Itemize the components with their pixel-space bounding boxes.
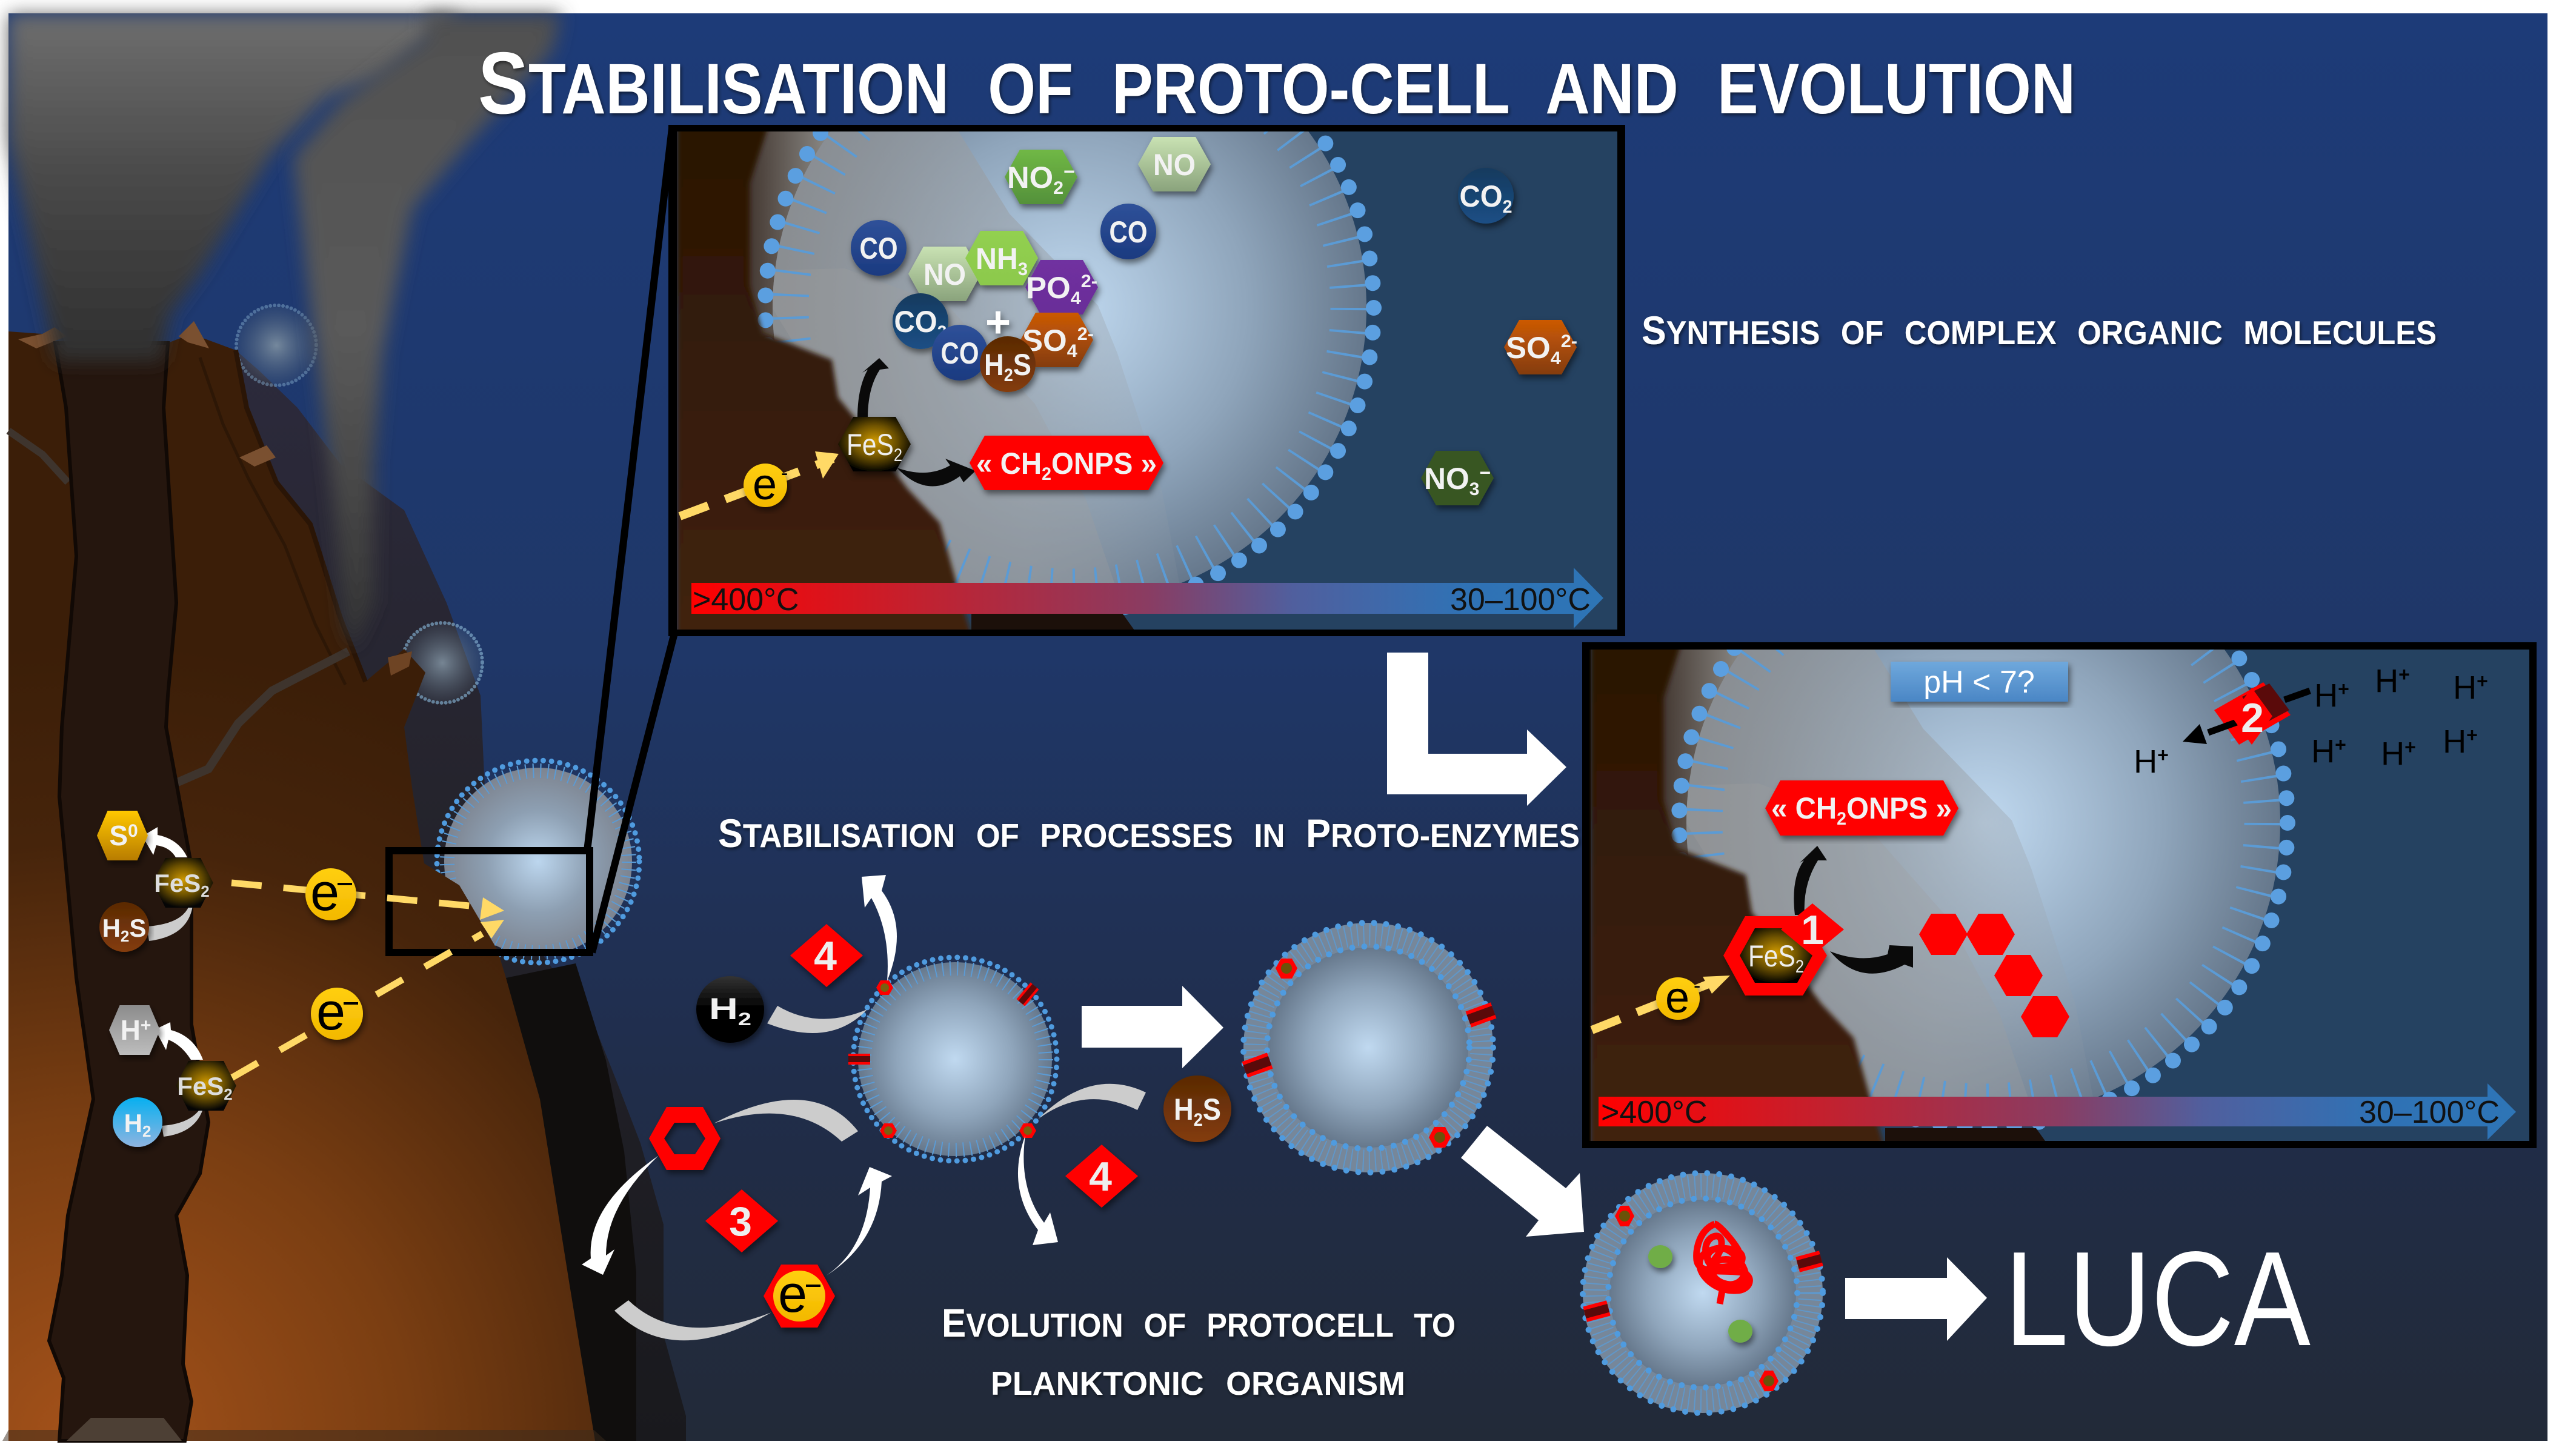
molecule: NO2-: − bbox=[1063, 161, 1075, 182]
channels bbox=[1242, 1002, 1496, 1078]
molecule: PO4: PO bbox=[1026, 271, 1070, 305]
temperature gradient bar bbox=[691, 568, 1603, 628]
molecule: NO left bbox=[908, 247, 981, 301]
catalyst: FeS2 in red hexagon: 2 bbox=[1795, 957, 1804, 977]
molecule: H2: H bbox=[124, 1109, 142, 1137]
molecule: H2S: 2 bbox=[121, 927, 129, 945]
protons: + bbox=[2398, 663, 2410, 685]
molecule: NO2- bbox=[1005, 150, 1077, 204]
molecule: NH3: NH bbox=[976, 242, 1019, 276]
catalyst: FeS2 upper: FeS bbox=[154, 869, 201, 897]
temperature gradient bar: >400°C bbox=[1601, 1095, 1707, 1130]
molecule: NO left: NO bbox=[923, 258, 966, 291]
red polymer chain bbox=[1919, 914, 2069, 1037]
molecule: H2 black bbox=[696, 976, 764, 1043]
panel: proto-enzymes inset bbox=[1582, 642, 2537, 1148]
smoke plume: large bbox=[8, 14, 464, 362]
molecule: CO: CO bbox=[1109, 215, 1148, 249]
molecule: CO2 right bbox=[1458, 168, 1514, 224]
heading: proto-enzymes: STABILISATION OF PROCESSES IN PROTO-ENZYMES bbox=[718, 811, 1580, 856]
molecule: H2S bbox=[99, 902, 149, 952]
protons: H bbox=[2381, 736, 2404, 772]
molecule: CO lower bbox=[932, 325, 988, 381]
empty red hexagon bbox=[649, 1107, 720, 1170]
arrow: L-shaped to enzyme inset bbox=[1387, 653, 1566, 806]
molecule: H2S brown: 2 bbox=[1194, 1110, 1203, 1130]
protons: + bbox=[2338, 678, 2349, 700]
molecule: SO4 right: 4 bbox=[1551, 348, 1561, 368]
cycle: H2S to protocell bbox=[1018, 1075, 1231, 1245]
protons: H bbox=[2314, 677, 2338, 714]
electron in red hexagon: e bbox=[778, 1265, 807, 1323]
catalyst: FeS2 bbox=[838, 417, 911, 471]
product: CH2ONPS: « CH bbox=[1771, 791, 1840, 825]
grey substrate arrows bbox=[147, 906, 202, 1137]
molecule: SO4 right: 2- bbox=[1561, 331, 1577, 351]
molecule: NO3: NO bbox=[1424, 462, 1469, 496]
electron lower bbox=[311, 983, 363, 1041]
catalyst: FeS2 in red hexagon: FeS bbox=[1748, 939, 1804, 973]
molecule: CO2 right: 2 bbox=[1503, 197, 1512, 217]
molecule: H2S brown bbox=[1163, 1075, 1231, 1142]
molecule: CO left bbox=[851, 220, 907, 276]
electron flow bbox=[680, 451, 839, 516]
catalyst: FeS2 lower: 2 bbox=[224, 1085, 233, 1103]
arrow: protocell A to B bbox=[1082, 986, 1223, 1068]
enzyme sites bbox=[1276, 959, 1451, 1148]
enzyme sites bbox=[876, 980, 1036, 1138]
molecule: S0: S bbox=[109, 820, 128, 851]
product: CH2ONPS: ONPS » bbox=[1846, 791, 1952, 825]
product: CH2ONPS: ONPS » bbox=[1051, 447, 1157, 480]
molecule: H2S brown: S bbox=[1203, 1092, 1221, 1126]
marker 4 upper: 4 bbox=[814, 933, 837, 979]
molecule: PO4: 2- bbox=[1081, 271, 1097, 291]
molecule: NO3: − bbox=[1479, 462, 1491, 484]
electron lower: e bbox=[316, 983, 345, 1041]
molecule: CO2 bbox=[893, 293, 948, 349]
molecule: SO4 right bbox=[1504, 320, 1577, 374]
dashed electron paths bbox=[231, 883, 482, 1078]
protons: H bbox=[2311, 733, 2335, 770]
molecule: CO bbox=[1100, 204, 1156, 259]
catalyst: FeS2 upper: 2 bbox=[201, 882, 210, 900]
molecule: CO2: 2 bbox=[937, 322, 947, 342]
enzyme sites bbox=[1615, 1206, 1779, 1391]
hydrothermal rock chimney bbox=[2, 305, 686, 1441]
molecule: NO3: 3 bbox=[1469, 479, 1479, 499]
electron flow: - bbox=[1694, 974, 1700, 997]
molecule: S0: 0 bbox=[128, 821, 138, 841]
electron flow: - bbox=[781, 462, 788, 485]
catalyst: FeS2: FeS bbox=[847, 428, 902, 462]
molecule: H2 bbox=[113, 1097, 162, 1147]
molecule: CO2 right: CO bbox=[1459, 179, 1505, 213]
catalyst: FeS2: 2 bbox=[894, 445, 902, 465]
vent channel bbox=[49, 343, 208, 1441]
molecule: SO4: 2- bbox=[1077, 324, 1094, 344]
molecule: H2S: H bbox=[984, 348, 1006, 382]
channels bbox=[1583, 1251, 1823, 1322]
molecule: NH3 bbox=[965, 231, 1038, 285]
molecule: SO4 right: SO bbox=[1506, 331, 1549, 365]
electron upper bbox=[305, 863, 356, 922]
molecule: CO2: CO bbox=[894, 305, 939, 339]
electron upper: e bbox=[310, 863, 339, 922]
product: CH2ONPS bbox=[970, 436, 1163, 490]
product: CH2ONPS bbox=[1765, 780, 1958, 836]
marker 1: 1 bbox=[1801, 907, 1824, 953]
electron flow: e bbox=[1665, 974, 1689, 1022]
marker 3 bbox=[705, 1189, 778, 1252]
red genetic material scribble bbox=[1697, 1224, 1749, 1304]
arrow: to LUCA bbox=[1845, 1257, 1987, 1341]
catalyst: FeS2 lower: FeS bbox=[177, 1072, 224, 1100]
molecule: H2S brown: H bbox=[1174, 1092, 1196, 1126]
temperature gradient bar bbox=[1599, 1083, 2516, 1140]
molecule: NO top: NO bbox=[1153, 148, 1196, 182]
white product arrows bbox=[142, 827, 203, 1060]
black reaction arrows bbox=[1794, 846, 1913, 974]
catalyst: FeS2 lower bbox=[176, 1061, 236, 1111]
molecule: H2S: S bbox=[1013, 348, 1031, 382]
molecule: NO2-: NO bbox=[1007, 161, 1053, 194]
marker 1 bbox=[1781, 903, 1844, 956]
molecule: NO3 bbox=[1421, 451, 1494, 505]
molecule: SO4 bbox=[1020, 313, 1094, 367]
plus sign: + bbox=[985, 298, 1011, 347]
product: CH2ONPS: 2 bbox=[1837, 809, 1846, 829]
molecule: NO2-: 2 bbox=[1053, 178, 1063, 198]
molecule: H+ bbox=[109, 1005, 160, 1055]
molecule: PO4 bbox=[1025, 260, 1098, 314]
heading: evolution line 2: PLANKTONIC ORGANISM bbox=[991, 1365, 1405, 1402]
protons: + bbox=[2157, 744, 2169, 766]
molecule: H+: + bbox=[141, 1016, 151, 1035]
proton pump channel with marker 2: 2 bbox=[2241, 695, 2264, 741]
LUCA label: LUCA bbox=[2005, 1224, 2311, 1374]
molecule: NH3: 3 bbox=[1018, 259, 1028, 279]
protons: H bbox=[2375, 663, 2398, 699]
molecule: H2S: H bbox=[102, 914, 121, 942]
heading: evolution: EVOLUTION OF PROTOCELL TO bbox=[942, 1300, 1456, 1345]
protons: H bbox=[2134, 743, 2157, 780]
icon: protocell on rock side bbox=[402, 623, 482, 703]
left vent reactions bbox=[97, 811, 504, 1147]
molecule: SO4: 4 bbox=[1067, 341, 1077, 361]
molecule: H2S: 2 bbox=[1004, 365, 1013, 385]
marker 4 upper bbox=[790, 924, 863, 987]
product: CH2ONPS: « CH bbox=[976, 447, 1045, 480]
crack: right branch bbox=[176, 651, 348, 783]
protons: H bbox=[2443, 723, 2466, 760]
electron in red hexagon bbox=[764, 1265, 835, 1328]
protocell B with thick membrane bbox=[1242, 923, 1496, 1172]
pH label: pH < 7? bbox=[1923, 665, 2035, 700]
molecules bbox=[838, 137, 1577, 505]
crack: left branch bbox=[8, 431, 68, 482]
temperature gradient bar: >400°C bbox=[693, 582, 799, 617]
marker 3: 3 bbox=[729, 1198, 752, 1245]
protocell A with membrane proteins bbox=[848, 957, 1057, 1161]
molecule: CO lower: CO bbox=[940, 336, 979, 370]
molecule: NO top bbox=[1138, 137, 1211, 191]
marker 4 lower: 4 bbox=[1089, 1154, 1112, 1200]
protons: H bbox=[2453, 670, 2477, 706]
black reaction arrows bbox=[857, 358, 976, 487]
icon: protocell on rock top bbox=[236, 305, 316, 385]
cycle: enzyme turnover bbox=[582, 1100, 892, 1340]
protocell emerging at vent bbox=[437, 760, 639, 963]
protons: + bbox=[2335, 734, 2346, 756]
proton pump channel with marker 2 bbox=[2183, 682, 2310, 745]
panel: synthesis inset bbox=[668, 125, 1625, 636]
temperature gradient bar: 30–100°C bbox=[1450, 582, 1591, 617]
molecule: H2 black: H bbox=[709, 992, 731, 1026]
zoom box on vent bbox=[389, 128, 674, 952]
heading: synthesis: SYNTHESIS OF COMPLEX ORGANIC MOLECULES bbox=[1642, 308, 2437, 353]
channels bbox=[848, 982, 1039, 1065]
molecule: H2: 2 bbox=[142, 1122, 151, 1140]
protocell C with contents bbox=[1583, 1173, 1823, 1413]
product: CH2ONPS: 2 bbox=[1042, 464, 1051, 484]
temperature gradient bar: 30–100°C bbox=[2359, 1095, 2500, 1130]
pH label bbox=[1891, 662, 2068, 702]
protons: + bbox=[2477, 670, 2488, 692]
title: STABILISATION OF PROTO-CELL AND EVOLUTION bbox=[478, 34, 2075, 132]
smoke plume: thin bbox=[293, 14, 561, 649]
molecule: S0 bbox=[97, 811, 148, 860]
green organelles bbox=[1648, 1245, 1752, 1343]
molecule: H2 black: 2 bbox=[738, 1009, 751, 1029]
protons: + bbox=[2466, 724, 2478, 746]
protons bbox=[2134, 663, 2488, 780]
catalyst: FeS2 in red hexagon bbox=[1723, 916, 1827, 996]
marker 4 lower bbox=[1065, 1145, 1138, 1208]
molecule: CO left: CO bbox=[859, 231, 898, 265]
electron arrowheads bbox=[480, 897, 504, 939]
molecule: H2S bbox=[980, 336, 1036, 392]
protons: + bbox=[2404, 736, 2416, 758]
arrow: protocell B to C bbox=[1461, 1126, 1584, 1237]
cycle: H2 to protocell bbox=[696, 875, 897, 1043]
catalyst: FeS2 upper bbox=[153, 858, 213, 908]
molecule: H2S: S bbox=[129, 914, 146, 942]
molecule: SO4: SO bbox=[1022, 324, 1066, 357]
electron flow bbox=[1592, 974, 1730, 1030]
electron flow: e bbox=[753, 460, 777, 509]
molecule: H+: H bbox=[121, 1014, 141, 1046]
molecule: PO4: 4 bbox=[1071, 288, 1081, 308]
